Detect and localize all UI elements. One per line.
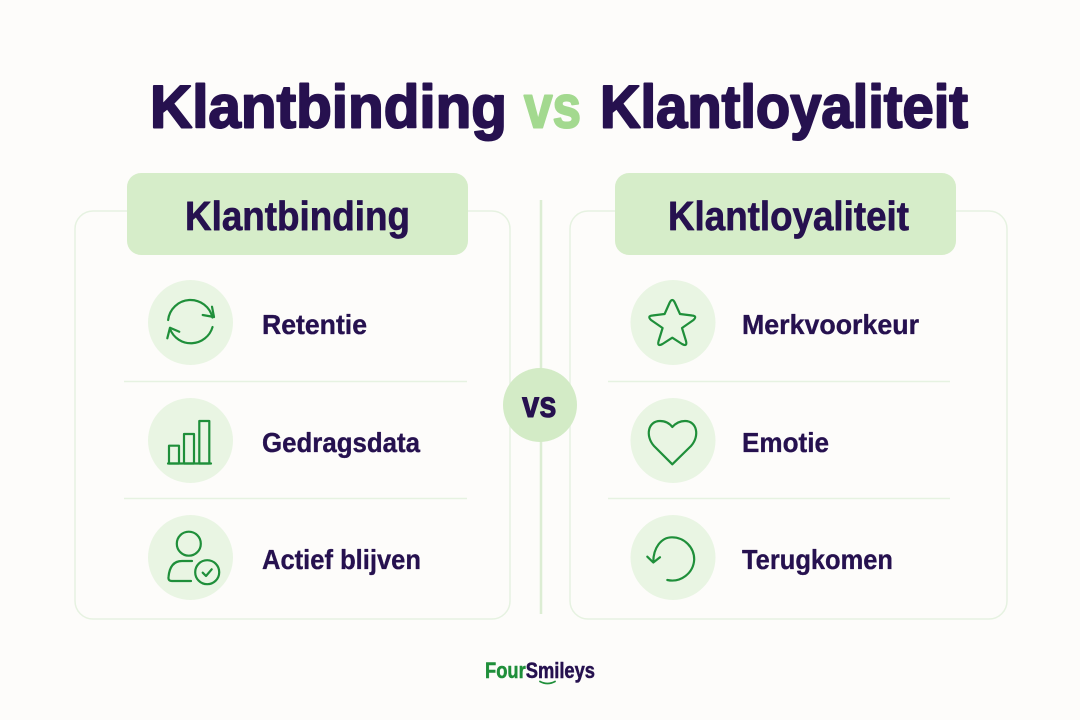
center divider line [540, 200, 542, 614]
item: Retentie [148, 280, 367, 365]
item: Actief blijven: Actief blijven [262, 544, 421, 575]
item: Retentie: Retentie [262, 309, 367, 340]
item: Terugkomen [630, 515, 893, 600]
item: Emotie: Emotie [742, 427, 829, 458]
heading: Klantloyaliteit: Klantloyaliteit [668, 193, 909, 239]
panel: Klantloyaliteit [570, 173, 1007, 619]
vs badge: vs [522, 384, 556, 425]
title [150, 74, 968, 140]
item: Gedragsdata: Gedragsdata [262, 427, 420, 458]
heading: Klantbinding: Klantbinding [185, 193, 410, 239]
title: Klantloyaliteit [600, 74, 968, 140]
item: Merkvoorkeur: Merkvoorkeur [742, 309, 919, 340]
item: Emotie [630, 398, 829, 483]
title: Klantbinding [150, 74, 507, 140]
title: vs [524, 74, 581, 140]
heading: Klantbinding [127, 173, 468, 255]
item: Gedragsdata [148, 398, 420, 483]
item: Actief blijven [148, 515, 421, 600]
item: Merkvoorkeur [630, 280, 919, 365]
vs badge [503, 368, 577, 442]
logo: FourSmileys: FourSmileys [485, 658, 595, 683]
heading: Klantloyaliteit [615, 173, 956, 255]
panel: Klantbinding [75, 173, 510, 619]
item: Terugkomen: Terugkomen [742, 544, 893, 575]
